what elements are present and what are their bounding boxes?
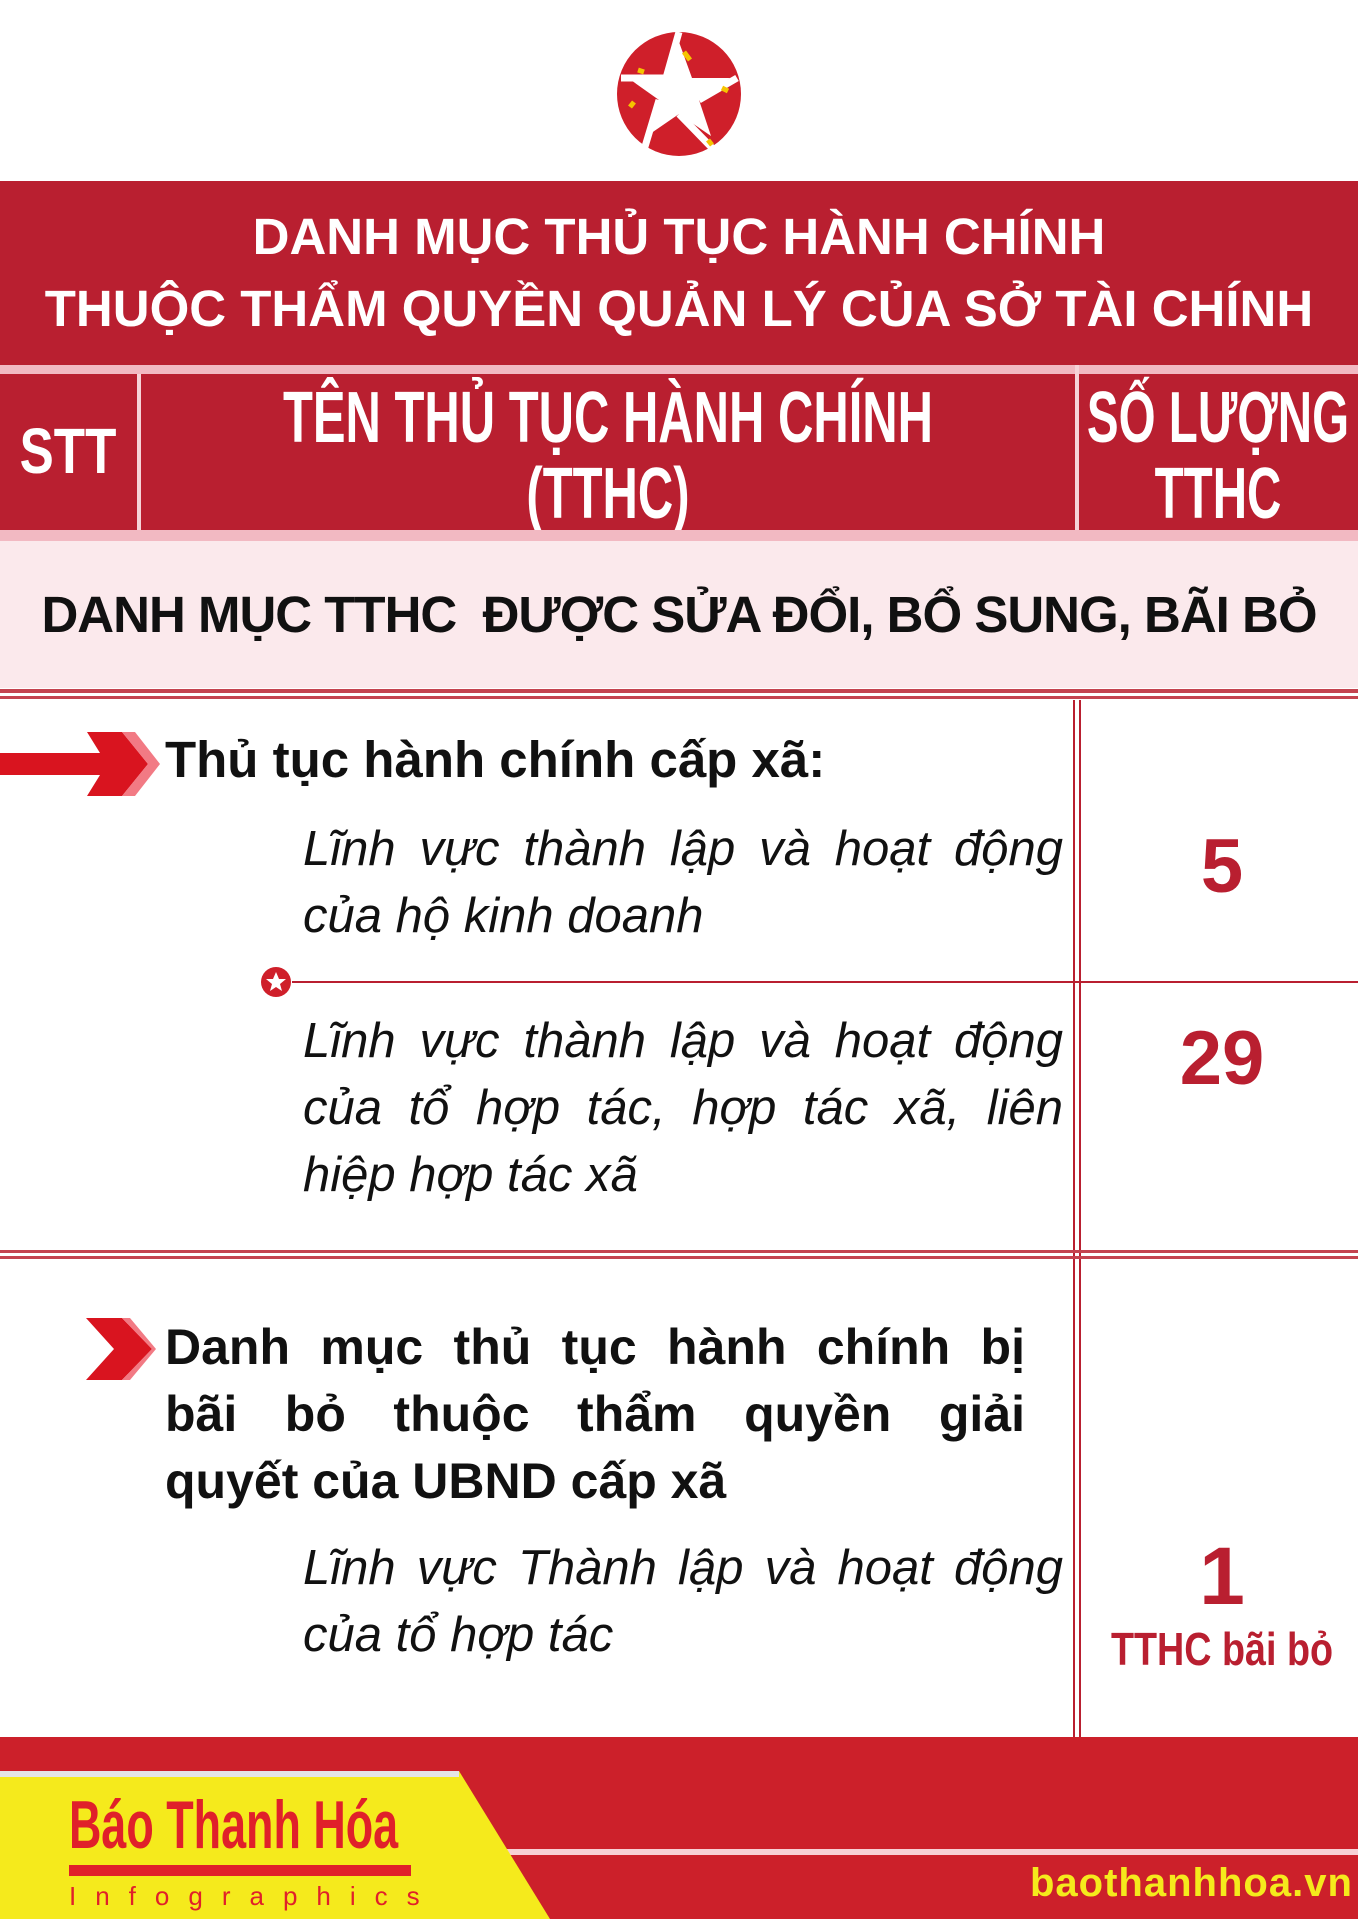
star separator: [261, 967, 1358, 997]
header: ten thu tuc: [283, 377, 933, 534]
header: so luong: TTHC: [1155, 454, 1281, 534]
table header: [0, 374, 1358, 530]
item 3: [303, 1541, 1063, 1662]
footer: [0, 1737, 1358, 1919]
title band: DANH MỤC THỦ TỤC HÀNH CHÍNH: [253, 208, 1105, 265]
item 1: Lĩnh vực thành lập và hoạt động: [303, 822, 1063, 876]
item 3: của tổ hợp tác: [303, 1608, 613, 1662]
header: so luong: SỐ LƯỢNG: [1087, 378, 1349, 458]
item 2: hiệp hợp tác xã: [303, 1148, 638, 1202]
header: ten thu tuc: TÊN THỦ TỤC HÀNH CHÍNH: [283, 378, 933, 458]
heading: bai bo: bãi bỏ thuộc thẩm quyền giải: [165, 1386, 1025, 1442]
footer brand panel: Infographics: [69, 1881, 439, 1911]
header: STT: STT: [20, 415, 116, 487]
icon: star of hands: [617, 32, 741, 156]
title band: THUỘC THẨM QUYỀN QUẢN LÝ CỦA SỞ TÀI CHÍNH: [45, 280, 1313, 337]
subheading band: [0, 541, 1358, 688]
item 1: [303, 822, 1063, 943]
arrow 2: [86, 1318, 156, 1380]
arrow 1: [0, 732, 160, 796]
label: TTHC bai bo: TTHC bãi bỏ: [1111, 1623, 1333, 1675]
item 2: Lĩnh vực thành lập và hoạt động: [303, 1014, 1063, 1068]
number 29: 29: [1180, 1016, 1264, 1101]
heading: bai bo: Danh mục thủ tục hành chính bị: [165, 1319, 1025, 1375]
heading: bai bo: quyết của UBND cấp xã: [165, 1453, 726, 1509]
column divider: [1073, 700, 1075, 1737]
number 1: 1: [1199, 1531, 1245, 1622]
heading: cap xa: Thủ tục hành chính cấp xã:: [165, 731, 825, 788]
header: so luong: [1087, 376, 1349, 534]
number 5: 5: [1201, 824, 1243, 909]
website: baothanhhoa.vn: [1030, 1861, 1353, 1905]
heading: bai bo: [165, 1319, 1025, 1509]
title band: [0, 181, 1358, 365]
item 3: Lĩnh vực Thành lập và hoạt động: [303, 1541, 1063, 1595]
brand text: Báo Thanh Hóa: [69, 1787, 398, 1863]
item 2: của tổ hợp tác, hợp tác xã, liên: [303, 1081, 1063, 1135]
footer brand panel: [0, 1771, 550, 1919]
header: ten thu tuc: (TTHC): [526, 454, 690, 534]
item 1: của hộ kinh doanh: [303, 889, 704, 943]
logo: [617, 32, 741, 156]
subheading band: DANH MỤC TTHC ĐƯỢC SỬA ĐỔI, BỔ SUNG, BÃI BỎ: [41, 586, 1317, 643]
item 2: [303, 1014, 1063, 1202]
